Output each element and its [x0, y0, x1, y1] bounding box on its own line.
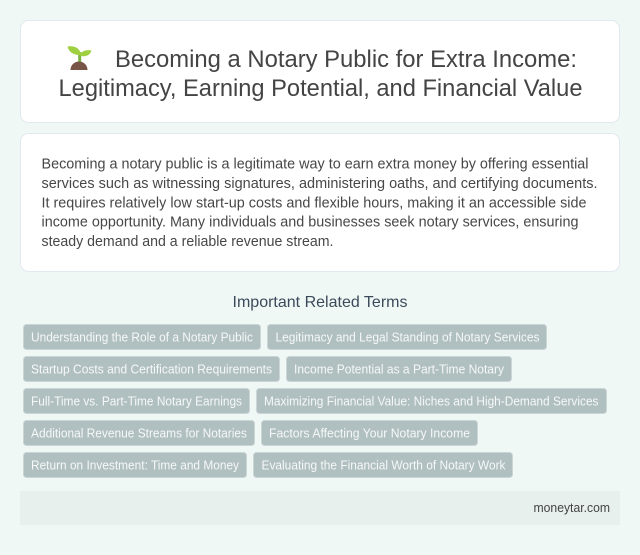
title: Legitimacy, Earning Potential, and Financial Value — [58, 75, 582, 102]
tag: legitimacy — [268, 324, 546, 350]
heading: important related terms: Important Related Terms — [232, 294, 408, 311]
panel: title card — [20, 20, 620, 122]
icon: sprout — [68, 46, 92, 70]
tag: income factors: Factors Affecting Your Notary Income — [269, 426, 470, 440]
tag: additional revenue — [24, 420, 254, 446]
tag: legitimacy: Legitimacy and Legal Standing of Notary Services — [276, 330, 540, 344]
tag: full-time vs part-time: Full-Time vs. Part-Time Notary Earnings — [31, 394, 242, 408]
tag: income potential: Income Potential as a Part-Time Notary — [294, 362, 504, 376]
text block: description: income opportunity. Many individuals and businesses seek notary services, ensuring — [42, 214, 578, 230]
text block: description: services such as witnessing signatures, administering oaths, and certifying documents. — [42, 175, 598, 192]
panel: related term tags — [24, 324, 606, 478]
tag: startup costs — [24, 356, 280, 382]
tag: additional revenue: Additional Revenue Streams for Notaries — [31, 426, 247, 440]
tag: role of a notary — [24, 324, 260, 350]
title: Becoming a Notary Public for Extra Income: — [115, 46, 577, 73]
panel: description — [20, 134, 620, 272]
tag: income potential — [286, 356, 512, 382]
text block: description: Becoming a notary public is a legitimate way to earn extra money by offering essential — [42, 156, 588, 172]
text block: description: steady demand and a reliable revenue stream. — [42, 233, 334, 250]
tag: income factors — [262, 420, 478, 446]
tag: startup costs: Startup Costs and Certification Requirements — [31, 362, 272, 376]
tag: full-time vs part-time — [24, 388, 250, 414]
tag: return on investment — [24, 452, 246, 478]
footer source text: moneytar.com — [534, 500, 610, 515]
tag: maximizing value: Maximizing Financial Value: Niches and High-Demand Services — [264, 394, 599, 408]
tag: financial worth: Evaluating the Financial Worth of Notary Work — [262, 458, 506, 472]
text block: description — [42, 156, 598, 250]
footer — [20, 491, 620, 525]
text block: description: It requires relatively low start-up costs and flexible hours, making it an accessible side — [42, 194, 586, 212]
title — [58, 46, 582, 102]
tag: return on investment: Return on Investment: Time and Money — [31, 458, 239, 472]
tag: role of a notary: Understanding the Role of a Notary Public — [31, 330, 253, 344]
tag: maximizing value — [256, 388, 606, 414]
tag: financial worth — [254, 452, 512, 478]
